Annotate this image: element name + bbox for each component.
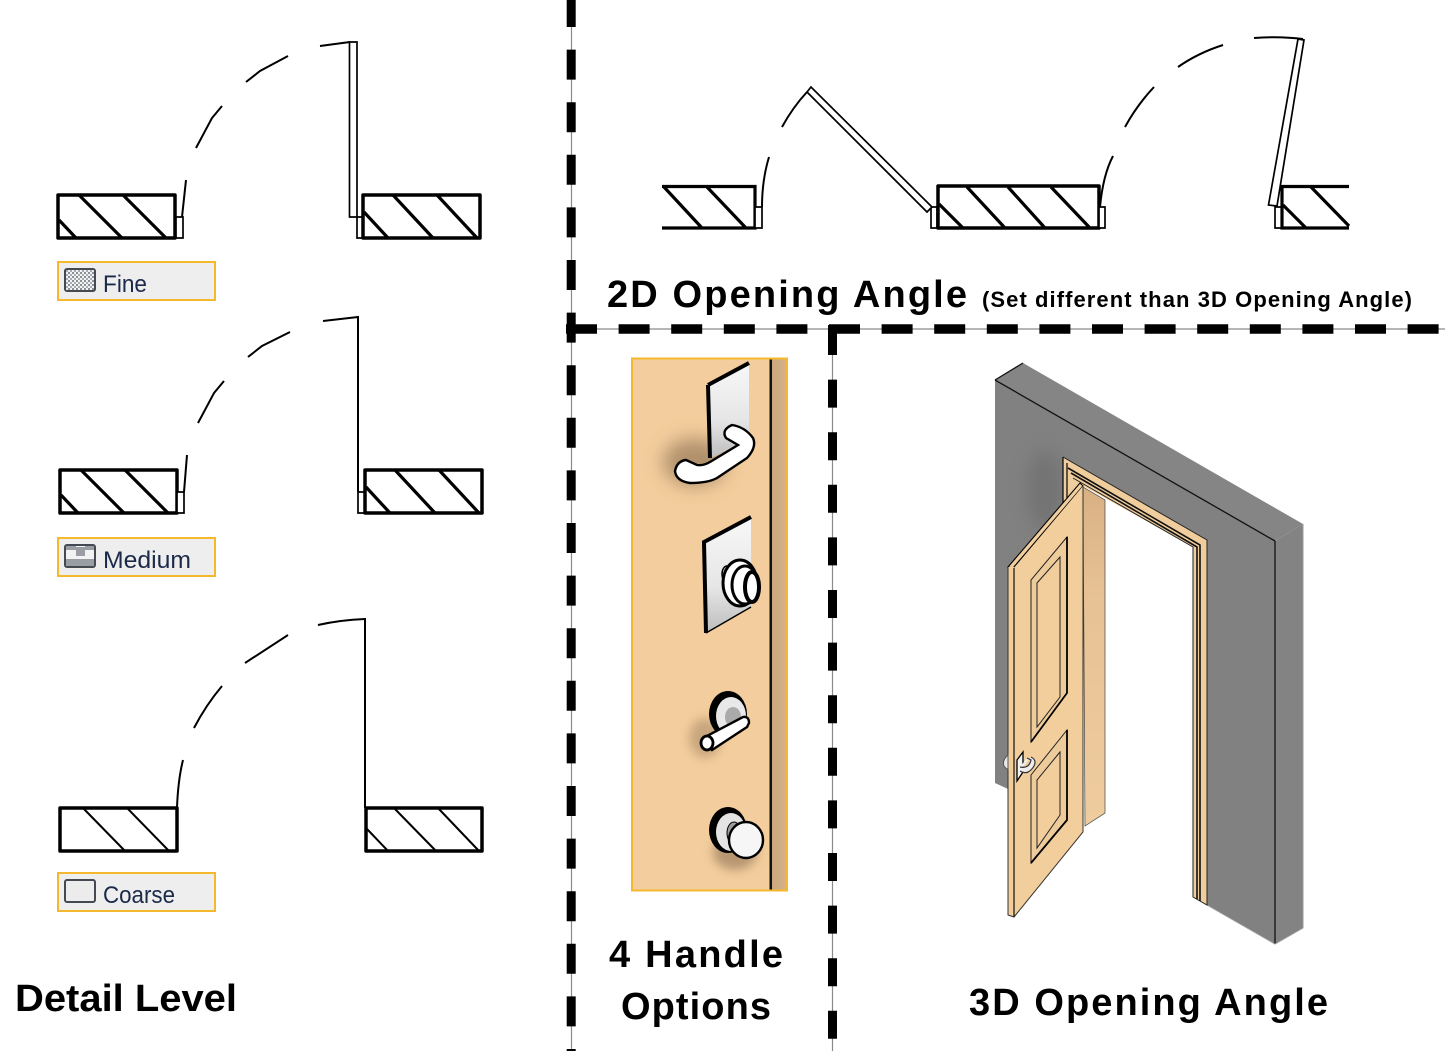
lower door panel bbox=[1031, 730, 1067, 863]
door frame trim bbox=[1063, 457, 1207, 905]
door plan: fine bbox=[58, 42, 480, 238]
heading: 3D opening angle: 3D Opening Angle bbox=[969, 982, 1328, 1024]
door leaf bbox=[1008, 483, 1083, 917]
detail level option: fine bbox=[58, 262, 215, 300]
panel: 2D opening angle bbox=[607, 37, 1412, 316]
panel: handle options bbox=[609, 358, 787, 1028]
upper door panel bbox=[1031, 537, 1067, 742]
heading: 4 handle options bbox=[609, 934, 783, 1028]
handle: round knob on plate bbox=[704, 517, 759, 633]
door handle bbox=[1004, 752, 1035, 781]
door plan: coarse bbox=[60, 619, 482, 851]
detail level option: medium bbox=[58, 538, 215, 576]
door plan: 45 degree swing bbox=[662, 87, 937, 228]
wall section: shared wall bbox=[938, 186, 1105, 228]
panel: 3D opening angle bbox=[969, 363, 1328, 1024]
panel: detail level bbox=[15, 42, 482, 1020]
heading: detail level: Detail Level bbox=[15, 978, 237, 1020]
handle: lever on round rose bbox=[689, 691, 749, 758]
detail level option: coarse bbox=[58, 873, 215, 911]
detail level option: fine: Fine bbox=[103, 271, 147, 298]
detail level option: coarse: Coarse bbox=[103, 882, 175, 909]
door swatch bbox=[632, 358, 787, 890]
note: set different than 3D opening angle: (Set different than 3D Opening Angle) bbox=[982, 287, 1412, 312]
heading: 4 handle options: Options bbox=[621, 986, 771, 1028]
heading: 2D opening angle: 2D Opening Angle bbox=[607, 274, 967, 316]
door plan: wide swing bbox=[1100, 37, 1349, 228]
handle: lever on tall plate bbox=[663, 363, 754, 486]
detail level option: medium: Medium bbox=[103, 547, 191, 574]
door plan: medium bbox=[60, 317, 482, 513]
handle: ball knob on round rose bbox=[709, 807, 763, 870]
heading: 4 handle options: 4 Handle bbox=[609, 934, 783, 976]
panel dividers bbox=[566, 0, 1445, 1051]
wall bbox=[995, 363, 1303, 944]
door jamb and leaf thickness bbox=[1083, 487, 1105, 826]
